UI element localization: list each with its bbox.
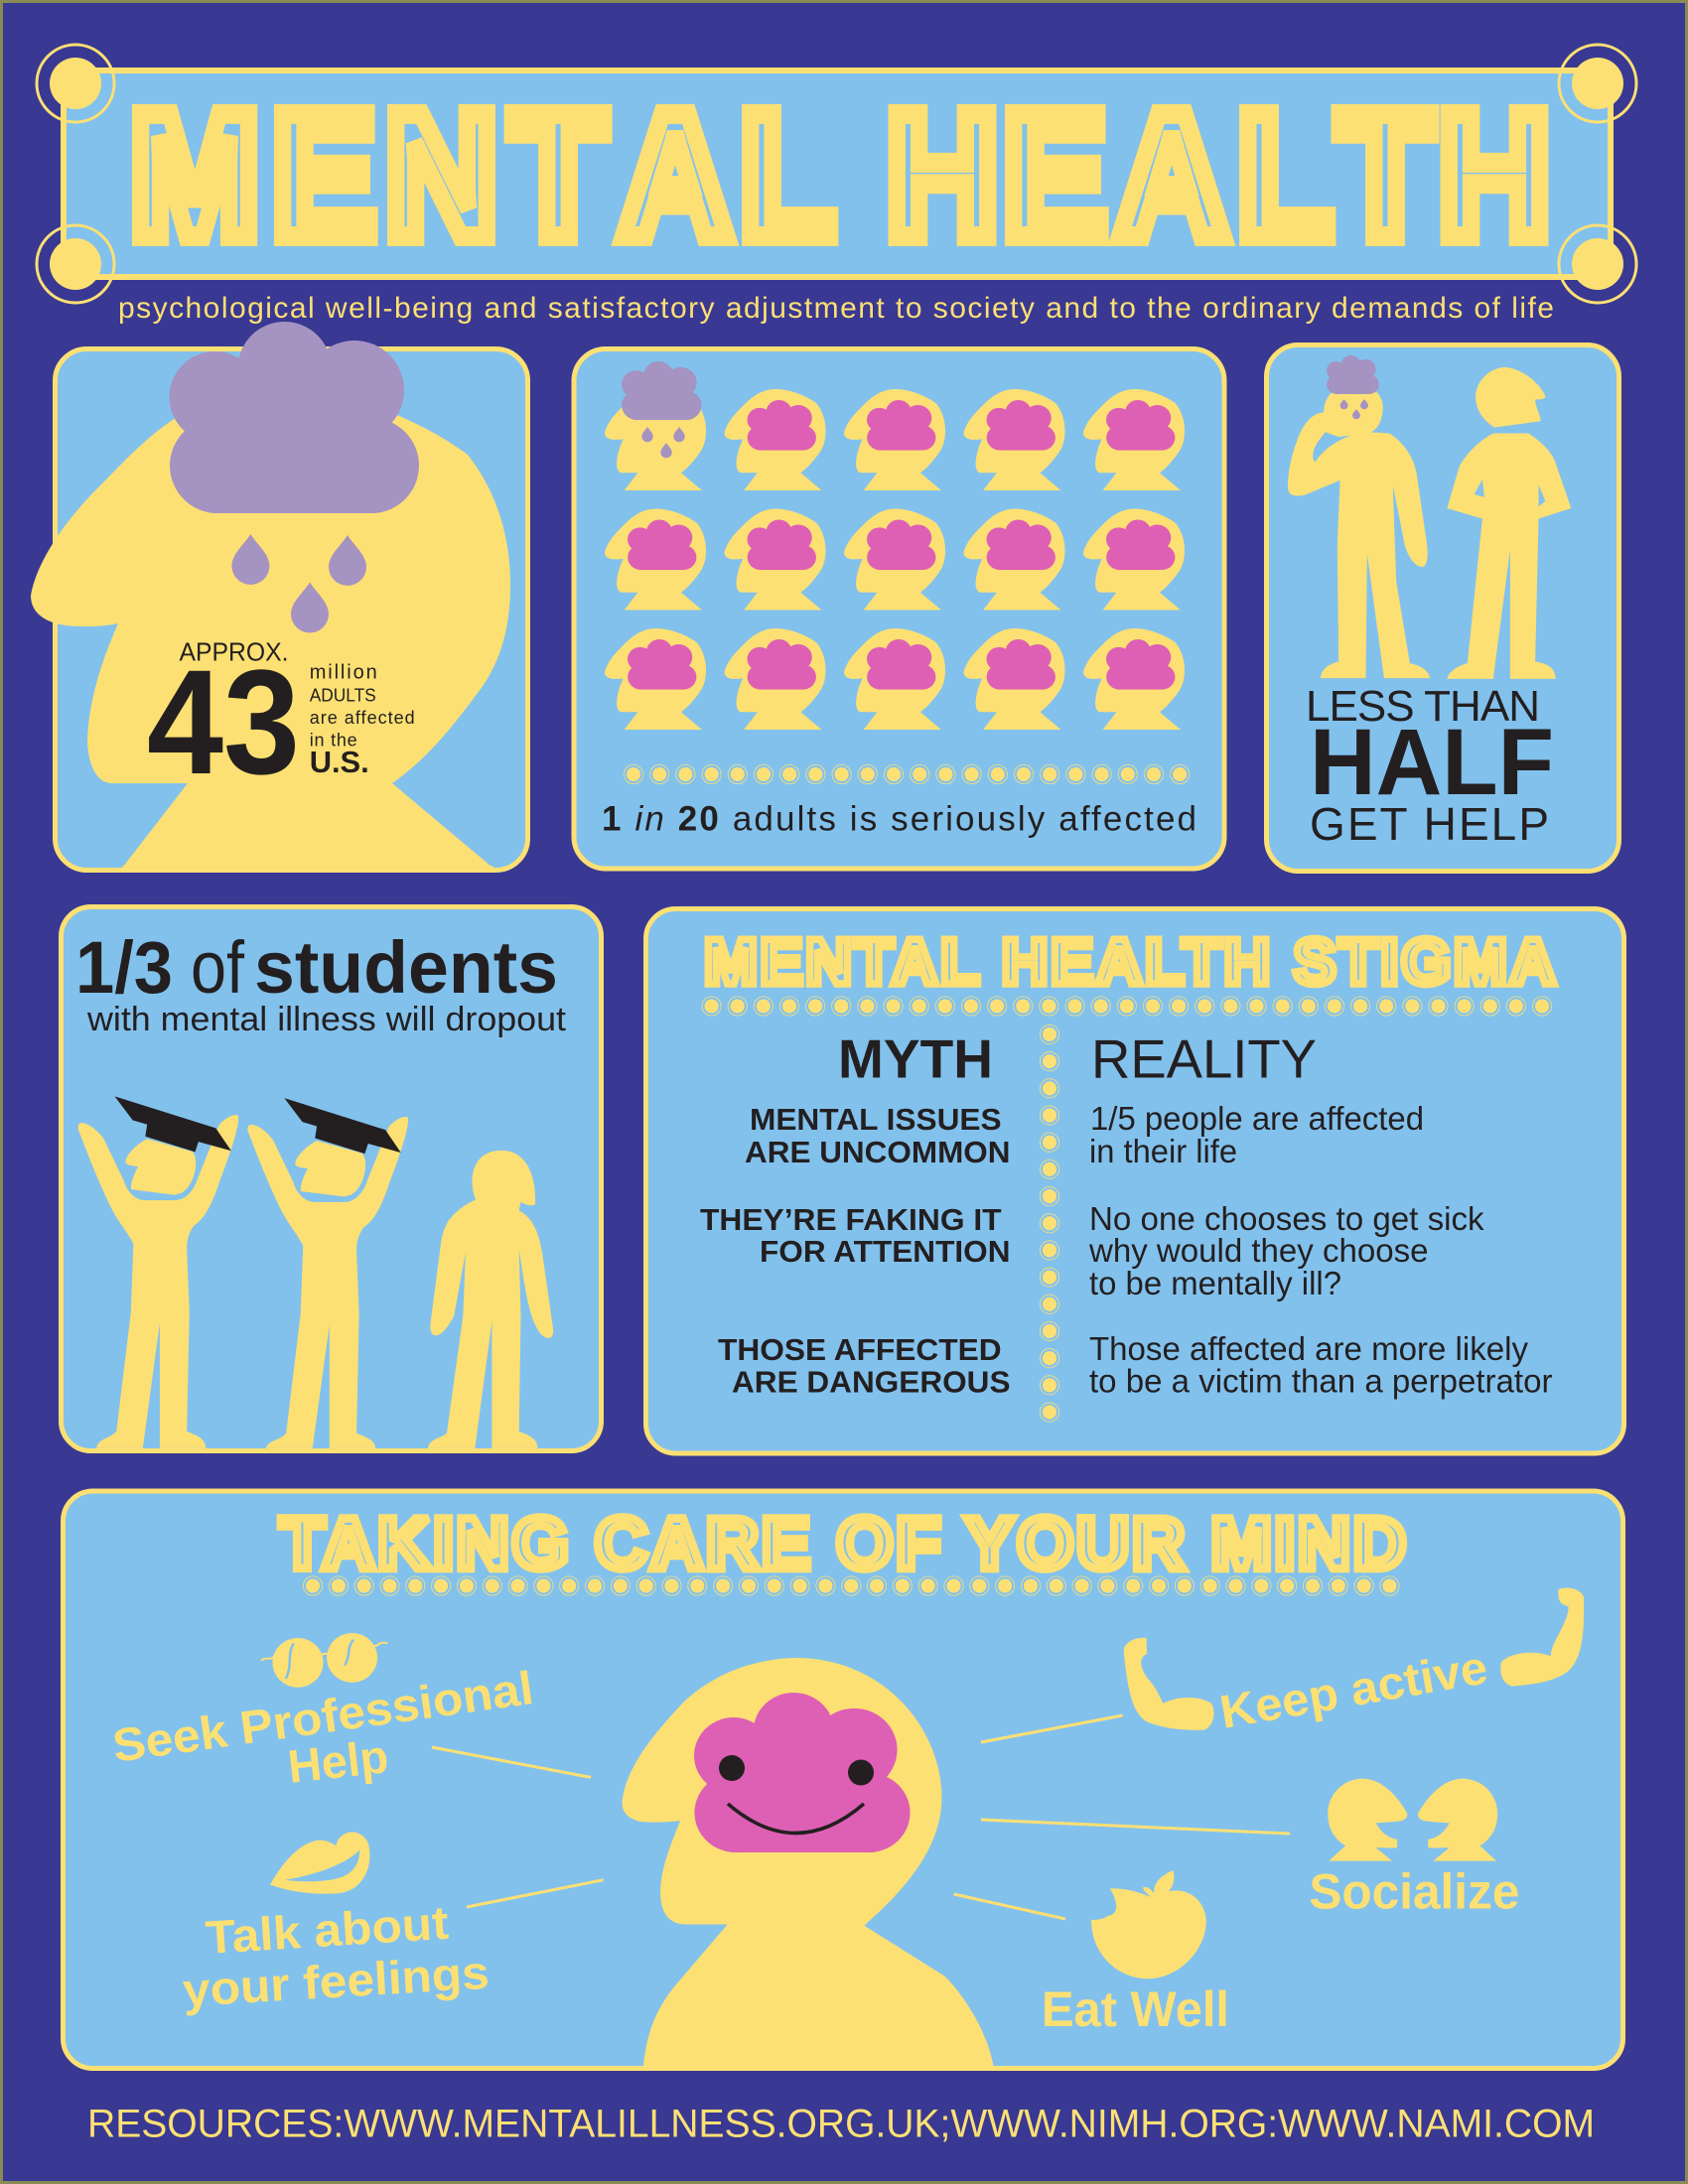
column: myths: ARE UNCOMMON	[745, 1135, 1011, 1169]
footer resources: RESOURCES:WWW.MENTALILLNESS.ORG.UK;WWW.NIMH.ORG:WWW.NAMI.COM	[87, 2103, 1595, 2146]
corner ornaments	[37, 45, 1636, 303]
column: realities: No one chooses to get sick	[1089, 1200, 1484, 1237]
head icon grid	[605, 361, 1185, 730]
heading: MENTAL HEALTH STIGMA	[704, 926, 1556, 998]
subtitle: psychological well-being and satisfactory adjustment to society and to the ordinary demands of life	[118, 292, 1554, 325]
panel: 43 million adults	[31, 322, 528, 870]
icon: lips	[270, 1832, 369, 1894]
heading: TAKING CARE OF YOUR MIND	[280, 1502, 1406, 1584]
statistic text	[147, 637, 415, 805]
label: keep active: Keep active	[1216, 1640, 1491, 1738]
statistic text: APPROX.	[179, 637, 288, 667]
icon: rain drops	[231, 534, 366, 633]
column: realities: to be a victim than a perpetrator	[1089, 1362, 1553, 1400]
figure: troubled person	[1288, 383, 1430, 678]
heading: 1/3	[75, 926, 173, 1009]
column: realities: to be mentally ill?	[1089, 1265, 1341, 1301]
statistic text: million	[310, 662, 377, 684]
statistic text: 43	[147, 638, 300, 805]
statistic text: U.S.	[310, 745, 369, 779]
icon: rain cloud	[169, 322, 419, 513]
icons: keep active muscles	[1124, 1587, 1584, 1730]
statistic text: are affected	[310, 708, 415, 728]
heading: students	[254, 926, 558, 1009]
icon: bitten apple	[1091, 1870, 1206, 1979]
column: myths: MENTAL ISSUES	[750, 1102, 1002, 1137]
figure: dropout	[428, 1151, 553, 1448]
column: myths: MYTH	[838, 1028, 993, 1090]
panel: students dropout	[62, 907, 602, 1451]
panel: taking care of your mind	[64, 1491, 1622, 2069]
subheading: with mental illness will dropout	[86, 1001, 567, 1038]
label: seek professional help: Seek Professional	[109, 1661, 536, 1772]
head silhouette	[31, 387, 510, 870]
statistic text	[1306, 682, 1554, 850]
label: socialize: Socialize	[1309, 1864, 1519, 1920]
panel: mental health stigma	[645, 909, 1624, 1453]
column: myths: ARE DANGEROUS	[732, 1364, 1011, 1400]
column: realities: Those affected are more likely	[1089, 1330, 1528, 1367]
central smiling head	[622, 1658, 993, 2066]
icon: small cloud	[1327, 355, 1379, 394]
statistic text: LESS THAN	[1306, 682, 1540, 731]
figures	[1288, 367, 1571, 679]
label: talk about your feelings	[181, 1896, 491, 2016]
column: realities: why would they choose	[1088, 1232, 1428, 1269]
column: myths: THEY’RE FAKING IT	[700, 1202, 1002, 1237]
connector lines	[432, 1715, 1290, 1919]
column: myths: FOR ATTENTION	[760, 1234, 1011, 1269]
statistic text: GET HELP	[1310, 798, 1549, 850]
statistic caption: 1 in 20 adults is seriously affected	[602, 800, 1196, 838]
statistic text: HALF	[1310, 710, 1554, 815]
icon: two heads talking	[1328, 1779, 1497, 1861]
heading	[75, 926, 558, 1009]
icon: sad head with cloud	[605, 361, 706, 490]
label: talk about your feelings: your feelings	[181, 1946, 491, 2016]
title: MENTAL HEALTH	[130, 75, 1550, 274]
column: realities: 1/5 people are affected	[1090, 1100, 1424, 1137]
figure: person seen from back	[1447, 367, 1571, 679]
column: realities: in their life	[1089, 1133, 1237, 1169]
column: myths: THOSE AFFECTED	[718, 1332, 1002, 1367]
panel: 1 in 20	[574, 349, 1224, 869]
title banner	[37, 45, 1636, 303]
label: talk about your feelings: Talk about	[204, 1896, 450, 1964]
figures	[77, 1096, 553, 1448]
heading: of	[191, 926, 244, 1009]
label: seek professional help: Help	[285, 1729, 390, 1793]
icon: small drops	[1340, 399, 1368, 419]
panel: less than half get help	[1267, 345, 1618, 872]
icon: glasses	[261, 1633, 387, 1688]
statistic text: ADULTS	[310, 685, 376, 705]
figure: graduate	[77, 1096, 238, 1448]
statistic text: in the	[310, 731, 357, 751]
column: realities: REALITY	[1091, 1028, 1317, 1090]
label: eat well: Eat Well	[1042, 1981, 1229, 2037]
column: myths	[700, 1028, 1011, 1400]
figure: graduate	[247, 1098, 408, 1448]
column: realities	[1088, 1028, 1553, 1400]
